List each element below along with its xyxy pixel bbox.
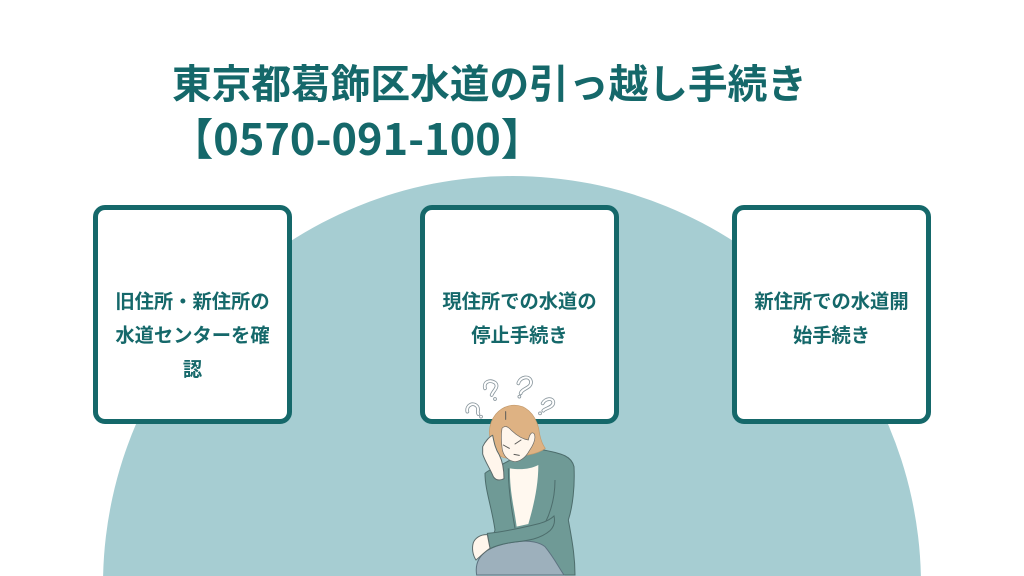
- title: 【0570-091-100】: [170, 106, 544, 168]
- figure: face: [501, 427, 535, 462]
- panel text: start procedure: 新住所での水道開: [754, 286, 909, 314]
- figure: raised hand: [483, 435, 504, 480]
- panel text: confirm water center: 旧住所・新住所の: [115, 286, 270, 314]
- panel text: confirm water center: 水道センターを確: [115, 320, 270, 348]
- panel text: stop procedure: 停止手続き: [471, 320, 568, 348]
- panel text: start procedure: 始手続き: [793, 320, 870, 348]
- panel: stop procedure: [420, 205, 619, 424]
- figure: lower hand: [473, 535, 490, 560]
- figure: face details: [503, 412, 521, 455]
- figure: legs: [476, 541, 564, 575]
- figure: jacket seams: [508, 468, 555, 528]
- figure: hair: [489, 405, 545, 458]
- panel text: stop procedure: [442, 286, 597, 348]
- title: 東京都葛飾区水道の引っ越し手続き: [172, 53, 807, 110]
- title: [170, 53, 807, 168]
- illustration: worried woman: [465, 376, 576, 576]
- panel: start procedure: [732, 205, 931, 424]
- panel text: confirm water center: [115, 286, 270, 382]
- panel: confirm water center: [93, 205, 292, 424]
- panel text: start procedure: [754, 286, 909, 348]
- figure: jacket: [485, 449, 575, 575]
- panel text: stop procedure: 現住所での水道の: [442, 286, 597, 314]
- background semicircle: [103, 176, 921, 576]
- figure: shirt: [510, 465, 538, 527]
- icon: question marks: [467, 377, 553, 417]
- figure: forearm: [487, 516, 554, 549]
- panel text: confirm water center: 認: [183, 354, 202, 382]
